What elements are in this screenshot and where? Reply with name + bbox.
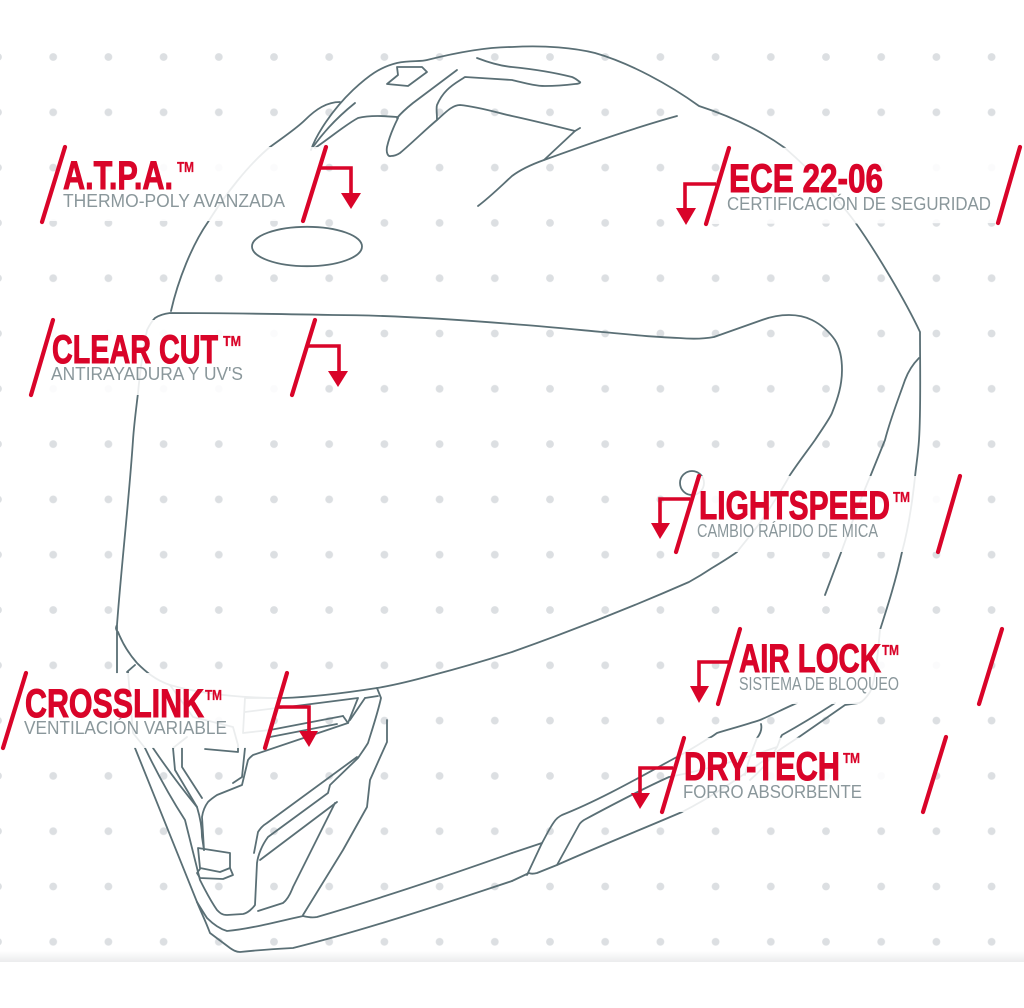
callout: LIGHTSPEED [651,476,960,552]
shell outline [171,102,340,311]
subtitle: THERMO-POLY AVANZADA [63,190,286,211]
callout slashes [662,737,946,812]
callout slashes [31,320,315,395]
visor pivot circle [680,471,704,495]
subtitle: FORRO ABSORBENTE [683,781,862,802]
callout: A.T.P.A. [42,147,361,222]
subtitle: CAMBIO RÁPIDO DE MICA [697,520,879,541]
arrow [320,168,361,209]
heading: TM [205,687,222,704]
subtitle: VENTILACIÓN VARIABLE [24,717,227,738]
visor outline [116,313,842,698]
callout: AIR LOCK [690,629,1002,704]
arrow [651,499,690,539]
callout slashes [42,147,326,222]
arrow [690,662,730,703]
heading: TM [223,333,241,350]
top vents [313,58,677,206]
bottom shadow band [0,951,1024,962]
callout slashes [706,147,1020,224]
heading: TM [893,489,910,506]
subtitle: CERTIFICACIÓN DE SEGURIDAD [727,193,991,214]
callout slashes [718,629,1002,704]
heading: AIR LOCK [739,637,881,681]
subtitle: SISTEMA DE BLOQUEO [739,673,899,694]
heading: A.T.P.A. [63,154,173,198]
callout slashes [676,476,960,552]
callout: CROSSLINK [3,673,318,748]
callout: ECE 22-06 [676,147,1020,225]
heading: TM [882,642,899,659]
heading: DRY-TECH [684,745,840,789]
arrow [676,184,716,225]
arrow [278,707,318,747]
helmet line drawing [116,46,920,952]
heading: ECE 22-06 [729,157,883,201]
heading: CLEAR CUT [52,328,218,372]
chin vent [127,665,387,915]
vent ellipse [252,227,362,266]
arrow [308,346,348,387]
callout: CLEAR CUT [31,320,348,395]
side shell lines [825,358,919,595]
heading: TM [843,750,860,767]
heading: CROSSLINK [25,682,204,726]
callout slashes [3,673,287,748]
heading: TM [177,159,194,176]
arrow [631,768,673,809]
heading: LIGHTSPEED [699,484,890,528]
lower shell lines [527,703,797,875]
callout: DRY-TECH [631,737,946,812]
subtitle: ANTIRAYADURA Y UV'S [51,363,243,384]
